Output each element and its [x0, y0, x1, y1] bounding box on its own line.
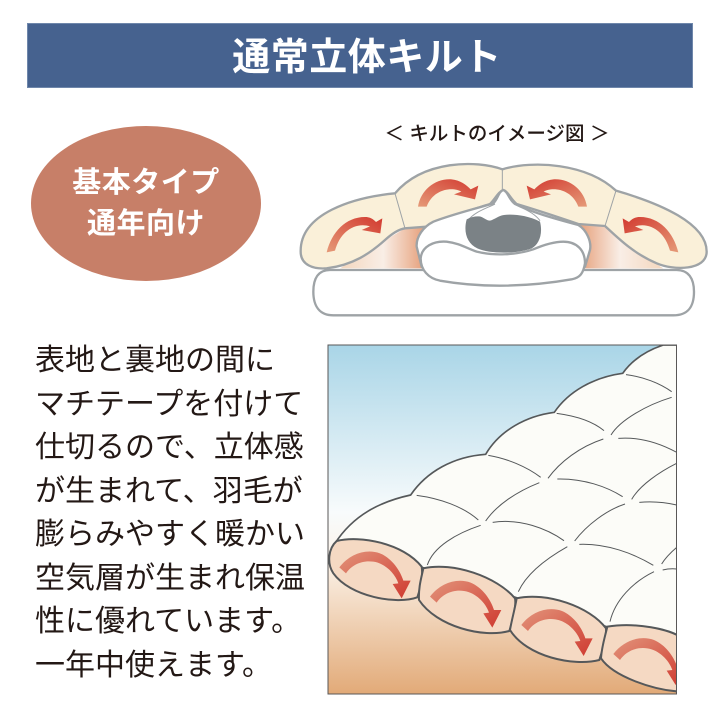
background gradient: [328, 345, 677, 694]
pillow top: [417, 190, 590, 267]
body text: が生まれて、羽毛が: [35, 474, 303, 508]
body text: 空気層が生まれ保温: [35, 562, 305, 594]
warm air under quilt: [340, 223, 663, 268]
arrows: [327, 179, 678, 252]
badge: basic type: [31, 126, 261, 281]
illustration frame: [328, 345, 676, 694]
mattress: [313, 270, 694, 315]
badge: basic type: 通年向け: [87, 208, 205, 240]
seam lines: [417, 375, 677, 622]
title banner: 通常立体キルト: [232, 37, 502, 79]
diagram caption: ＜ キルトのイメージ図 ＞: [385, 123, 609, 145]
quilt cross-section illustration: [301, 164, 707, 315]
quilt cell openings: [329, 539, 680, 692]
head outline dome: [468, 204, 540, 221]
body text: 仕切るので、立体感: [35, 431, 304, 464]
body text: 性に優れています。: [35, 605, 301, 638]
body text: マチテープを付けて: [35, 388, 303, 420]
pillow base: [421, 242, 585, 286]
quilt perspective illustration: [328, 345, 685, 694]
body text: [35, 344, 305, 682]
quilt surface: [335, 345, 678, 640]
body text: 膨らみやすく暖かい: [35, 518, 305, 551]
head: [465, 215, 541, 253]
diagrams: [300, 162, 708, 694]
title banner: [27, 23, 693, 88]
body text: 一年中使えます。: [35, 648, 272, 682]
airflow arrows: [339, 551, 685, 685]
quilt cells: [301, 164, 707, 268]
badge: basic type: 基本タイプ: [72, 167, 220, 199]
body text: 表地と裏地の間に: [35, 344, 275, 377]
